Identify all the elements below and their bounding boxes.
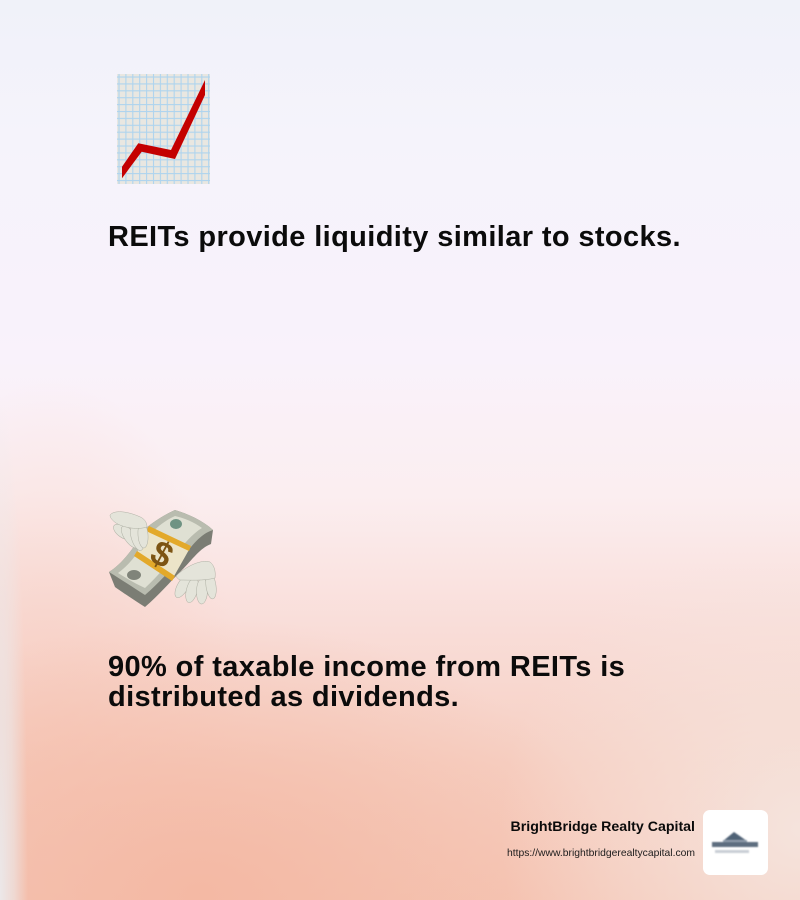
stack edge: [109, 510, 213, 607]
heading: liquidity: REITs provide liquidity similar to stocks.: [108, 221, 681, 253]
heading: dividends: [108, 651, 625, 713]
company name: BrightBridge Realty Capital: [511, 819, 695, 835]
icon: chart with upward trend: [117, 74, 210, 184]
left wing: [110, 512, 149, 552]
website url: https://www.brightbridgerealtycapital.com: [507, 848, 695, 859]
right wing: [172, 561, 218, 604]
band: [137, 528, 190, 578]
icon: money with wings: [109, 510, 216, 607]
footer branding: [507, 810, 768, 875]
heading: dividends: distributed as dividends.: [108, 681, 459, 713]
heading: dividends: 90% of taxable income from REITs is: [108, 651, 625, 683]
logo: [703, 810, 768, 875]
icon: money with wings: $: [144, 533, 180, 576]
top bill: [109, 510, 213, 595]
